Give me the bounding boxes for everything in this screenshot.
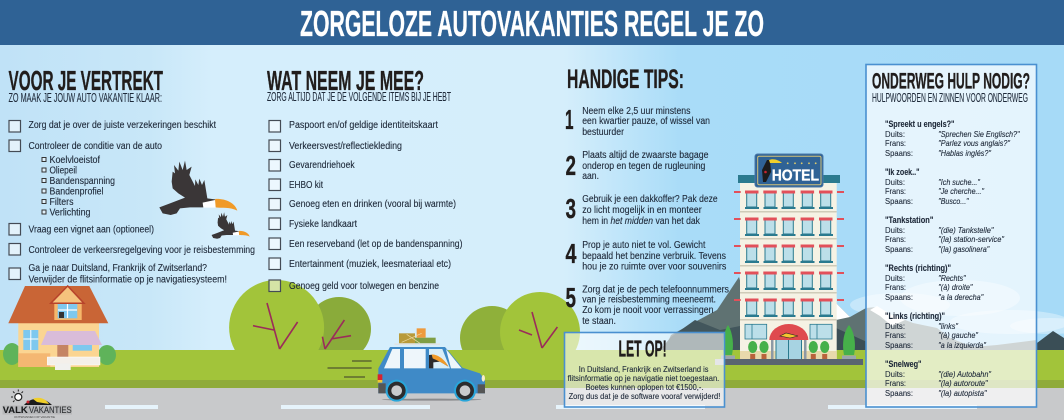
phrase: snelweg: "(la) autopista" [938,388,988,398]
tip 5: Zo kom je nooit voor verrassingen [582,305,714,316]
phrase: tankstation: "(la) station-service" [938,234,1005,244]
tip 5: 5 [566,282,576,313]
phrase: tankstation: "(la) gasolinera" [938,244,990,254]
subheading: ZORG ALTIJD DAT JE DE VOLGENDE ITEMS BIJ JE HEBT [267,89,451,104]
clouds [850,280,1064,334]
tip 4: 4 [566,238,577,269]
logo: valk vakanties: VAKANTIES [29,405,72,416]
phrase: snelweg [885,359,992,398]
tip 5: Zorg dat je de pech telefoonnummers [582,284,729,296]
phrase: links: Spaans: [885,340,913,350]
tip 5 [566,282,729,327]
icon: house [3,286,116,370]
phrase: tankstation: Spaans: [885,244,913,254]
panel: onderweg hulp nodig [866,64,1036,407]
tip 3 [566,193,718,227]
checklist: Bandenprofiel [50,186,104,198]
logo: valk vakanties [2,390,72,419]
speed lines [328,361,372,377]
phrase: snelweg: "(la) autoroute" [938,378,989,388]
phrase: spreekt u engels: Duits: [885,129,905,139]
phrase: ik zoek: "Ik zoek.." [885,167,920,177]
checklist: Ga je naar Duitsland, Frankrijk of Zwitserland? [28,263,207,274]
phrase: ik zoek: "Ich suche..." [938,177,981,187]
checklist: Filters [50,197,74,208]
ground and road [0,350,1064,420]
phrase: ik zoek: Frans: [885,186,906,196]
phrase: snelweg: "Snelweg" [885,359,922,369]
phrase: rechts: "(à) droite" [938,282,973,292]
phrase: ik zoek: "Je cherche..." [938,186,985,196]
tip 2 [566,150,709,182]
title: ZORGELOZE AUTOVAKANTIES REGEL JE ZO [300,3,764,44]
tip 3: hem in het midden van het dak [582,216,700,227]
phrase: tankstation [885,215,1005,254]
header bar [0,0,1064,45]
phrase: links [885,311,987,350]
phrase: spreekt u engels: "Spreekt u engels?" [885,119,954,129]
phrase: spreekt u engels: Spaans: [885,148,913,158]
phrase: links: "links" [938,321,959,331]
tip 3: 3 [566,193,576,224]
tip 5: te staan. [582,316,616,327]
phrase: spreekt u engels: "Sprechen Sie Englisch?" [938,129,1020,139]
phrase: ik zoek: Spaans: [885,196,913,206]
checklist: Oliepeil [50,166,77,176]
checklist [269,120,462,292]
phrase: rechts [885,263,984,302]
tip 1 [565,104,710,138]
tip 4 [566,238,726,272]
tip 1: een kwartier pauze, of wissel van [582,116,710,127]
phrase: tankstation: Frans: [885,234,906,244]
phrase: links: Frans: [885,330,906,340]
checklist: Entertainment (muziek, leesmateriaal etc) [289,259,451,270]
checklist: Koelvloeistof [50,155,100,166]
phrase: spreekt u engels: Frans: [885,138,906,148]
phrase: spreekt u engels [885,119,1020,158]
icon: car with luggage [378,328,485,402]
phrase: links: "(à) gauche" [938,330,979,340]
hotel sign: HOTEL [772,168,819,185]
callout: let op: Zorg dus dat je de software vooraf verwijderd! [569,391,720,401]
tip 5: van je reisbestemming meeneemt. [582,294,716,306]
hotel sign [755,154,823,187]
callout: let op: flitsinformatie op je navigatie niet toegestaan. [568,373,719,383]
tip 2: onderop en tegen de rugleuning [582,161,705,172]
checklist: Verkeersvest/reflectiekleding [289,141,402,152]
callout: let op: In Duitsland, Frankrijk en Zwitserland is [579,364,708,374]
callout: let op: Boetes kunnen oplopen tot €1500,-. [586,382,703,392]
checklist: Bandenspanning [50,176,115,187]
logo: valk vakanties: VALK [3,405,28,416]
phrase: rechts: "Rechts (richting)" [885,263,951,273]
phrase: rechts: "a la derecha" [938,292,984,302]
heading: HANDIGE TIPS: [567,64,684,94]
heading: VOOR JE VERTREKT [8,65,163,96]
icon: hotel [715,154,863,365]
phrase: spreekt u engels: "Parlez vous anglais?" [938,138,1011,148]
phrase: ik zoek: Duits: [885,177,905,187]
tip 3: zo licht mogelijk in en monteer [582,205,702,216]
checklist: Fysieke landkaart [289,219,357,230]
tip 2: 2 [566,150,576,181]
checklist: Genoeg geld voor tolwegen en benzine [289,281,439,292]
checklist: Paspoort en/of geldige identiteitskaart [289,120,438,131]
phrase: snelweg: Frans: [885,378,906,388]
checklist: Controleer de conditie van de auto [28,141,162,152]
phrase: rechts: Spaans: [885,292,913,302]
phrase: spreekt u engels: "Hablas inglés?" [938,148,992,158]
checklist: Controleer de verkeersregelgeving voor je reisbestemming [28,245,255,256]
panel: handige tips [565,64,729,327]
tip 1: Neem elke 2,5 uur minstens [582,106,691,117]
checklist: Verwijder de flitsinformatie op je navigatiesysteem! [28,274,227,286]
tip 1: 1 [565,104,574,135]
checklist: Gevarendriehoek [289,160,355,171]
phrase: tankstation: Duits: [885,225,905,235]
tip 4: Prop je auto niet te vol. Gewicht [582,240,706,251]
checklist: Vraag een vignet aan (optioneel) [28,224,154,236]
tip 1: bestuurder [582,127,625,138]
checklist: Een reserveband (let op de bandenspanning) [289,239,462,250]
tip 2: aan. [582,171,599,182]
checklist [9,120,255,286]
phrase: links: Duits: [885,321,905,331]
phrase: links: "Links (richting)" [885,311,945,321]
subheading: ZO MAAK JE JOUW AUTO VAKANTIE KLAAR: [8,90,162,105]
phrase: ik zoek [885,167,985,206]
logo: valk vakanties: ONTSPANNEN OP VAKANTIE [14,415,55,419]
hotel base and plants [715,325,863,365]
phrase: tankstation: "(die) Tankstelle" [938,225,994,235]
callout: let op [564,332,724,407]
checklist: Genoeg eten en drinken (vooral bij warmte) [289,199,456,210]
floor lines and windows [734,190,844,320]
heading: WAT NEEM JE MEE? [267,65,424,96]
tip 4: bepaald het benzine verbruik. Tevens [582,251,726,262]
tip 3: Gebruik je een dakkoffer? Pak deze [582,194,718,205]
phrase: snelweg: "(die) Autobahn" [938,369,992,379]
panel: voor je vertrekt [8,65,255,286]
phrase: tankstation: "Tankstation" [885,215,933,225]
trees [229,280,580,375]
icon: large toucan [159,161,237,215]
mountains [660,277,1064,350]
hotel entrance [740,324,837,359]
panel: wat neem je mee [267,65,462,292]
phrase: rechts: Duits: [885,273,905,283]
checklist: Zorg dat je over de juiste verzekeringen beschikt [28,120,216,131]
tip 4: hou je zo ruimte over voor souvenirs [582,262,726,272]
phrase: rechts: Frans: [885,282,906,292]
tip 2: Plaats altijd de zwaarste bagage [582,150,709,161]
callout: let op: LET OP! [618,336,667,362]
icon: small toucan [212,212,250,239]
checklist: EHBO kit [289,180,323,191]
phrase: snelweg: Duits: [885,369,905,379]
phrase: ik zoek: "Busco..." [938,196,969,206]
phrase: links: "a la izquierda" [938,340,987,350]
checklist: Verlichting [50,208,90,218]
phrase: rechts: "Rechts" [938,273,966,283]
phrase: snelweg: Spaans: [885,388,913,398]
